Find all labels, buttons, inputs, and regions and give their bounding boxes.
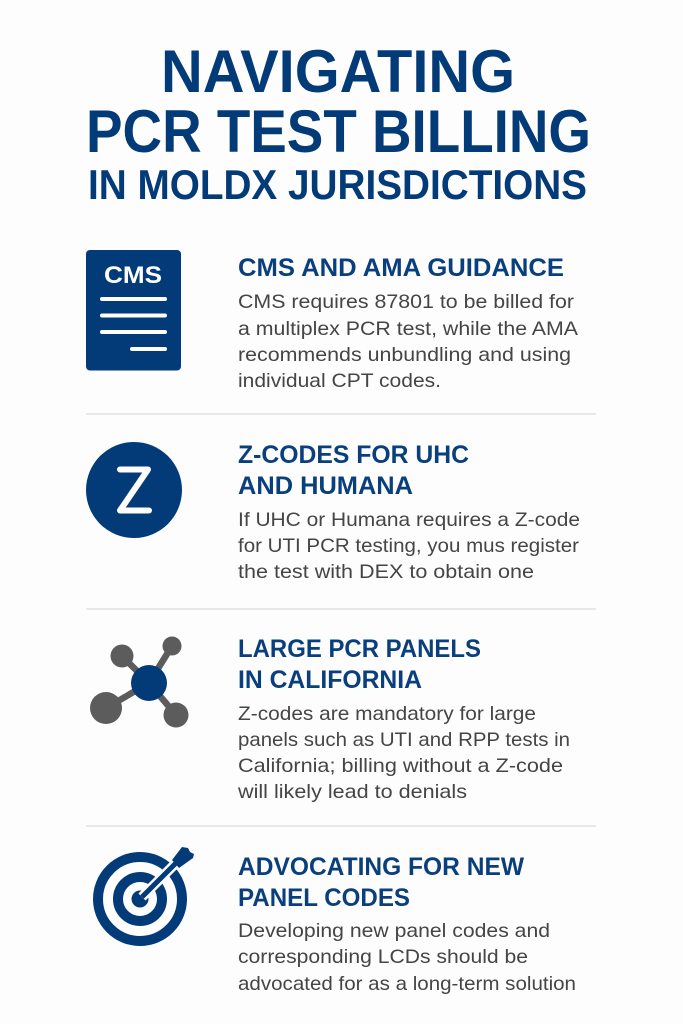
text: Large PCR panels body: California; billing without a Z-code: [238, 755, 563, 777]
heading: Z-codes for UHC and Humana: AND HUMANA: [238, 472, 413, 500]
panel: CMS and AMA guidance: [86, 250, 578, 392]
text: Z-codes body: the test with DEX to obtain one: [238, 561, 534, 583]
text: CMS and AMA guidance body: CMS requires 87801 to be billed for: [238, 291, 575, 313]
heading: Large PCR panels in California: IN CALIFORNIA: [238, 666, 422, 694]
panel: Large PCR panels in California: [90, 635, 570, 803]
heading: CMS and AMA guidance: CMS AND AMA GUIDANCE: [238, 254, 564, 282]
title: NAVIGATING: [161, 38, 515, 105]
text: Z-codes body: [238, 509, 580, 583]
heading: Advocating for new panel codes: [238, 853, 524, 912]
heading: Large PCR panels in California: LARGE PCR PANELS: [238, 635, 481, 663]
text: Z-codes body: If UHC or Humana requires a Z-code: [238, 509, 580, 531]
panel: Z-codes for UHC and Humana: [86, 441, 580, 583]
text: Advocating body: corresponding LCDs should be: [238, 946, 528, 968]
text: Large PCR panels body: Z-codes are mandatory for large: [238, 703, 536, 725]
text: Large PCR panels body: [237, 703, 570, 803]
icon: target with arrow: [98, 847, 194, 941]
icon: molecule network: [90, 636, 188, 728]
heading: Large PCR panels in California: [238, 635, 481, 694]
title: IN MOLDX JURISDICTIONS: [88, 161, 587, 208]
title: PCR TEST BILLING: [86, 98, 591, 165]
heading: Z-codes for UHC and Humana: Z-CODES FOR UHC: [238, 441, 469, 469]
text: Advocating body: advocated for as a long-term solution: [238, 973, 576, 995]
text: Large PCR panels body: will likely lead to denials: [237, 781, 467, 803]
text: Large PCR panels body: panels such as UTI and RPP tests in: [238, 729, 570, 751]
text: Advocating body: [238, 920, 576, 995]
icon: CMS document: CMS: [104, 262, 162, 289]
panel: Advocating for new panel codes: [98, 847, 576, 995]
heading: Advocating for new panel codes: ADVOCATING FOR NEW: [238, 853, 524, 881]
heading: Advocating for new panel codes: PANEL CODES: [238, 884, 410, 912]
heading: Z-codes for UHC and Humana: [238, 441, 469, 500]
text: CMS and AMA guidance body: recommends unbundling and using: [238, 344, 571, 366]
text: Advocating body: Developing new panel codes and: [238, 920, 550, 942]
title: [86, 38, 591, 208]
icon: CMS document: [86, 250, 181, 370]
text: CMS and AMA guidance body: [238, 291, 578, 392]
text: CMS and AMA guidance body: a multiplex PCR test, while the AMA: [238, 318, 578, 340]
icon: Z circle: [86, 442, 182, 538]
text: Z-codes body: for UTI PCR testing, you mus register: [238, 535, 580, 557]
text: CMS and AMA guidance body: individual CPT codes.: [238, 370, 441, 392]
